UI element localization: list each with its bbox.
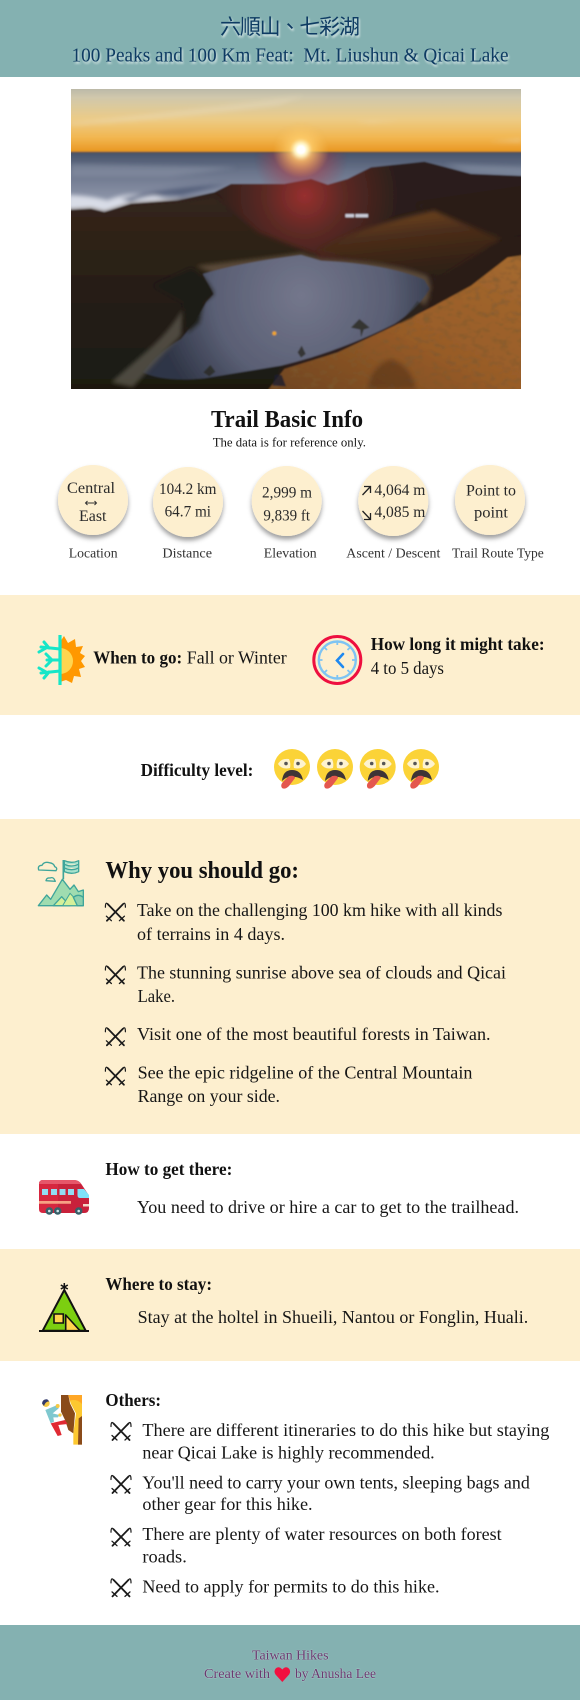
bullet: permits: Need to apply for permits to do this hike. <box>142 1576 440 1596</box>
bullet: carry gear: other gear for this hike. <box>142 1494 313 1514</box>
footer credit <box>204 1667 376 1682</box>
text: hotel suggestions: Stay at the holtel in Shueili, Nantou or Fonglin, Huali. <box>138 1307 528 1327</box>
stat: ascent and descent: Ascent / Descent <box>346 546 440 561</box>
bullet: ridgeline: See the epic ridgeline of the Central Mountain <box>138 1062 473 1082</box>
heading: why you should go: Why you should go: <box>105 858 299 884</box>
stat: trail route type <box>452 465 544 561</box>
stat: distance: 64.7 mi <box>165 504 212 521</box>
bullet: carry gear: You'll need to carry your own tents, sleeping bags and <box>142 1472 530 1492</box>
bullet: water resources <box>111 1524 502 1566</box>
panel: why you should go <box>0 819 580 1134</box>
subheading: The data is for reference only. <box>213 434 366 450</box>
footer <box>0 1625 580 1700</box>
stat: distance <box>153 467 223 561</box>
stat: trail route type: point <box>474 505 509 522</box>
stat: ascent and descent: 4,064 m <box>374 482 426 499</box>
how long it might take <box>371 634 545 678</box>
bullet: itineraries: There are different itineraries to do this hike but staying <box>142 1420 550 1440</box>
chinese title: 六順山、七彩湖 <box>220 11 360 41</box>
photo: sunrise over Qicai Lake <box>71 89 521 389</box>
bullet: water resources: roads. <box>142 1546 187 1566</box>
bullet: sunrise: The stunning sunrise above sea of clouds and Qicai <box>137 962 506 982</box>
how long it might take: 4 to 5 days <box>371 658 444 678</box>
icon: sun and snowflake <box>39 635 85 685</box>
icon: tent <box>39 1283 89 1331</box>
stat: location <box>58 465 128 561</box>
when to go: When to go: <box>93 647 182 667</box>
bullet: 100 km hike: Take on the challenging 100 km hike with all kinds <box>137 900 503 920</box>
bullet: itineraries <box>111 1420 550 1462</box>
bullet: carry gear <box>111 1472 530 1514</box>
stat: elevation: Elevation <box>264 546 317 561</box>
heading: how to get there: How to get there: <box>105 1159 232 1179</box>
bullet: itineraries: near Qicai Lake is highly recommended. <box>142 1442 435 1462</box>
heading: others: Others: <box>105 1390 161 1410</box>
bullet: 100 km hike: of terrains in 4 days. <box>137 924 285 944</box>
bullet: sunrise: Lake. <box>138 986 175 1006</box>
stat: location: Central <box>67 480 116 497</box>
stat: trail route type: Point to <box>466 483 516 500</box>
panel: season and duration <box>0 595 580 715</box>
when to go: Fall or Winter <box>187 647 287 667</box>
panel: how to get there <box>0 1134 580 1249</box>
icon: rock climber <box>42 1395 82 1445</box>
footer site name: Taiwan Hikes <box>252 1648 328 1663</box>
bullet: water resources: There are plenty of water resources on both forest <box>142 1524 502 1544</box>
stat: distance: 104.2 km <box>159 481 217 498</box>
difficulty rating: four faces <box>274 749 439 789</box>
english title: 100 Peaks and 100 Km Feat: Mt. Liushun & Qicai Lake <box>72 44 508 66</box>
bullet: 100 km hike <box>105 900 503 944</box>
heading: trail basic info: Trail Basic Info <box>211 407 363 433</box>
header banner <box>0 0 580 77</box>
footer credit: by Anusha Lee <box>295 1667 376 1682</box>
bullet: sunrise <box>105 962 506 1006</box>
footer credit: Create with <box>204 1667 270 1682</box>
icon: clock <box>314 636 361 684</box>
stat: ascent and descent <box>346 466 440 561</box>
stat: elevation: 9,839 ft <box>263 508 311 525</box>
text: drive or hire a car: You need to drive or hire a car to get to the trailhead. <box>137 1197 519 1217</box>
stat: location: Location <box>69 546 118 561</box>
stat: location: East <box>79 508 107 525</box>
stat: distance: Distance <box>162 546 212 561</box>
stat: ascent and descent: 4,085 m <box>374 504 426 521</box>
how long it might take: How long it might take: <box>371 634 545 654</box>
stat: elevation: 2,999 m <box>262 485 313 502</box>
icon: bus <box>39 1180 89 1215</box>
when to go <box>93 647 287 667</box>
icon: mountain with flag <box>38 860 83 906</box>
panel: where to stay <box>0 1249 580 1361</box>
bullet: ridgeline <box>105 1062 473 1106</box>
bullet: forests: Visit one of the most beautiful forests in Taiwan. <box>137 1024 491 1044</box>
difficulty label: Difficulty level: <box>141 760 253 780</box>
stat: trail route type: Trail Route Type <box>452 546 544 561</box>
stat: elevation <box>252 466 322 561</box>
heading: where to stay: Where to stay: <box>105 1274 212 1294</box>
bullet: ridgeline: Range on your side. <box>138 1086 280 1106</box>
panel: others <box>42 1390 550 1596</box>
